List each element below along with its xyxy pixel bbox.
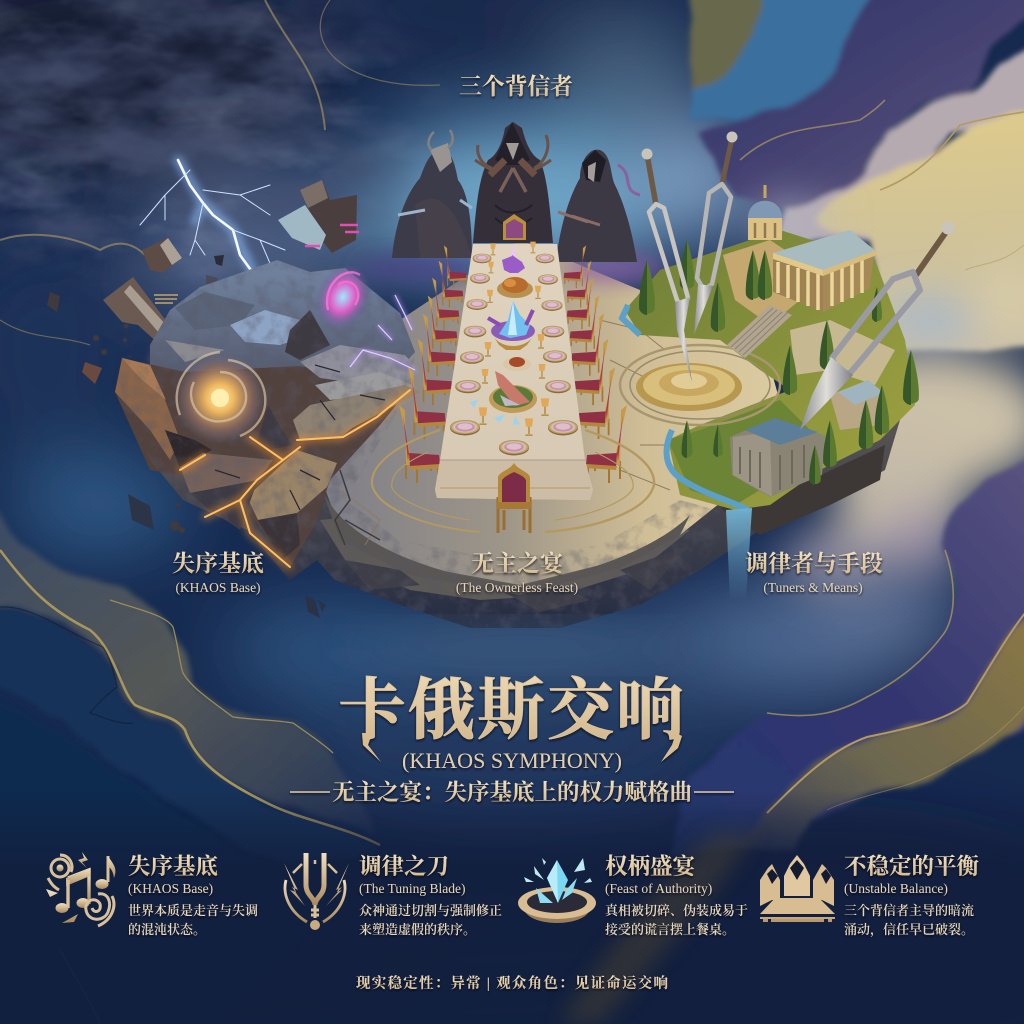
grass terraces [625,230,915,510]
throne at table head [503,214,526,240]
lava cracks [180,390,410,567]
crystal shards on table [470,400,520,425]
english subtitle: (The Tuning Blade) [359,881,466,896]
icon: three hooded figures and table [760,855,835,922]
three betrayers hooded figures [392,122,640,262]
purple vortex [305,255,381,339]
chairs along right side [564,245,627,483]
ink wash: lower right bands [670,455,1024,850]
description: 众神通过切割与强制修正 [359,903,502,918]
description: 涌动，信任早已破裂。 [844,922,974,938]
rock surface texture [100,250,720,640]
icon: tuning fork with bolts [284,853,349,930]
heading: 权柄盛宴 [605,854,696,879]
gold veins lower left [0,550,380,1024]
purple crystal centerpiece [502,243,525,273]
info item: unstable balance [760,854,979,938]
tuning fork blade: left [642,148,692,382]
label: tuners and means: (Tuners & Means) [763,580,863,595]
cracked grey slabs [300,345,420,385]
icon: music notes and spirals [46,852,115,926]
river and waterfall [622,305,752,600]
title: 卡俄斯交响 [338,657,684,753]
main temple [773,230,877,312]
description: 世界本质是走音与失调 [128,903,258,918]
label: ownerless feast: 无主之宴 [471,550,565,576]
betrayer: center [473,122,553,243]
cracked brown slabs [180,453,273,493]
heading: 失序基底 [128,854,218,879]
golden vortex [174,352,266,444]
label: ownerless feast [456,550,578,595]
description: 接受的谎言摆上餐桌。 [605,922,735,937]
english subtitle: (KHAOS Base) [128,881,213,896]
purple mist at figures' feet [356,254,665,282]
info item: KHAOS base [46,852,258,937]
description: 来塑造虚假的秩序。 [359,922,476,937]
central stone floor [322,240,785,595]
info item: feast of authority [518,854,748,937]
domed palace and wing [723,185,800,325]
front throne chair [497,463,531,533]
ink wash: upper right [690,0,1024,350]
panel: tuners' garden and temples [620,185,919,600]
place settings [450,254,578,456]
fog below island [350,631,690,659]
fog behind island [785,350,1024,590]
gold ritual ring around the table [372,430,654,532]
floating island underside [150,400,900,628]
english subtitle: (Unstable Balance) [844,881,948,896]
footer status line: 现实稳定性：异常 | 观众角色：见证命运交响 [356,974,668,992]
english subtitle: (Feast of Authority) [605,881,712,896]
label: tuners and means [745,551,883,595]
bottom fade under info row [0,790,1024,870]
description: 三个背信者主导的暗流 [844,903,974,918]
label: ownerless feast: (The Ownerless Feast) [456,580,578,595]
purple energy cracks [350,295,415,370]
ruin: drifting stones [47,255,326,618]
heading: 调律之刀 [359,854,449,879]
ruin: leaning tower [103,277,178,345]
label: tuners and means: 调律者与手段 [745,551,883,576]
haze blending upper right into fog [752,206,1024,351]
description: 真相被切碎、伪装成易于 [605,903,748,918]
ink wash: lower left veil [0,495,380,1024]
meat platter [489,371,537,413]
upper grey rock mass [150,260,415,420]
blue crystal bowl [488,301,535,350]
heading: three betrayers: 三个背信者 [459,74,573,99]
label: KHAOS base: 失序基底 [172,550,264,576]
panel: banquet table [435,242,593,533]
storm cloud texture [0,0,418,280]
side buildings [790,320,895,430]
lower brown rock base [115,358,410,567]
title english: (KHAOS SYMPHONY) [402,748,622,773]
roast platter [497,277,533,298]
betrayer: left [392,130,472,258]
label: KHAOS base [172,550,264,595]
ink wash: bottom gold streak [560,832,755,1024]
stairs [727,305,792,358]
lower temple [730,418,825,497]
gold veins lower right [0,0,1024,813]
cypress trees [639,240,919,485]
heading: 不稳定的平衡 [844,854,979,879]
dark boulder [258,405,292,450]
tuning fork blade: right [800,222,954,430]
panel: KHAOS base shattered rocks [100,250,720,640]
tablecloth [435,244,593,500]
info item: tuning blade [284,853,502,937]
stone cracks [215,365,385,510]
description: 的混沌状态。 [128,922,206,937]
goblets [479,242,549,435]
tuning fork blade: middle [694,132,738,335]
ruin: clock block [142,238,182,273]
subtitle: 无主之宴：失序基底上的权力赋格曲 [332,780,692,805]
lightning bolt [140,160,285,310]
betrayer: right [556,150,640,262]
gold tuning disc [620,345,780,425]
ruin: floating temple block [278,180,359,253]
small dish [503,357,531,371]
label: KHAOS base: (KHAOS Base) [175,580,261,595]
floating ruins [47,180,359,618]
chairs along left side [399,245,466,483]
icon: crystal on plate [518,858,596,923]
